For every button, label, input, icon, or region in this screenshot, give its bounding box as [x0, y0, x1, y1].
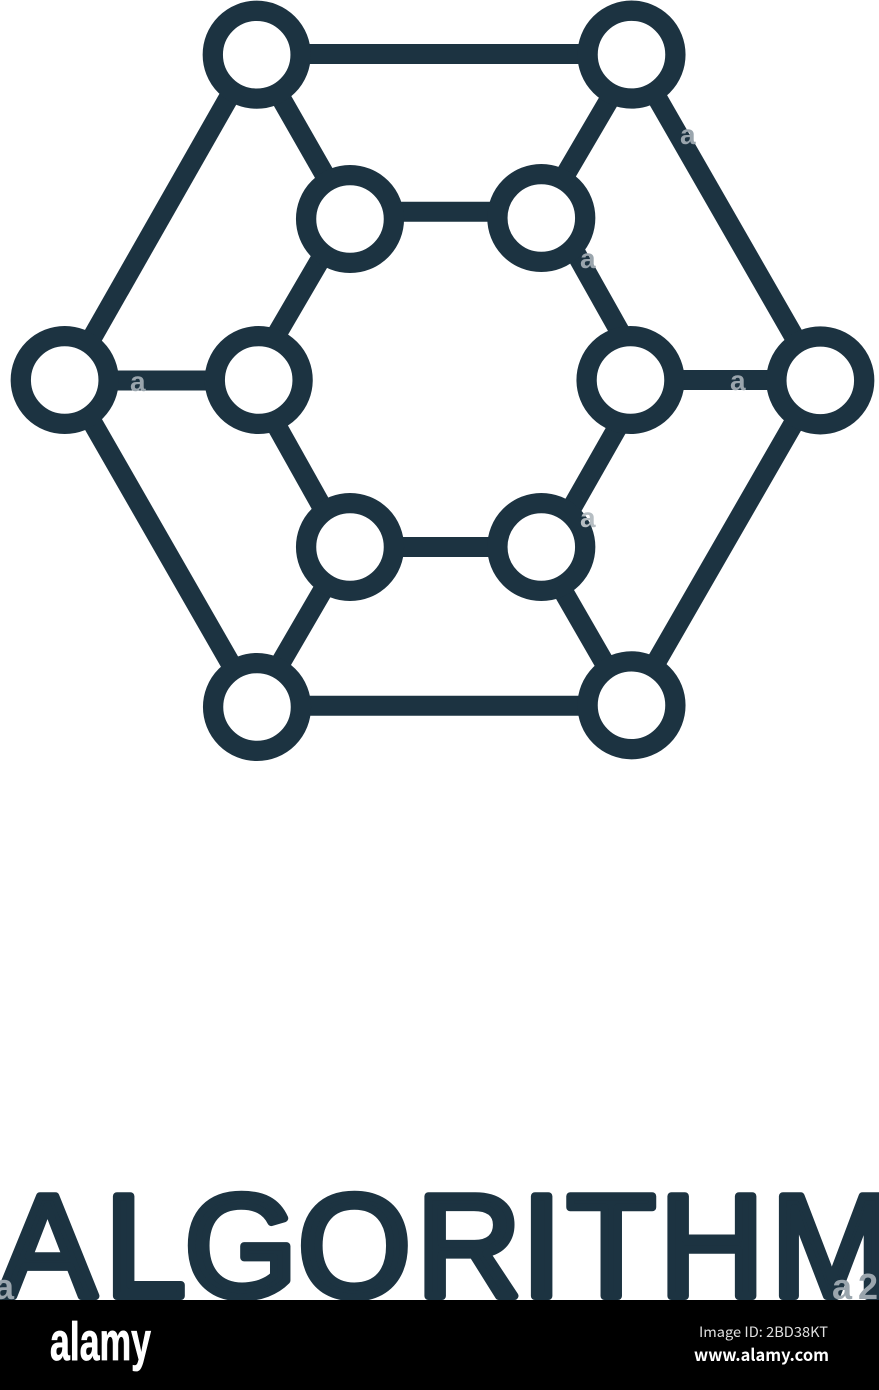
watermark fragments: a [832, 1266, 853, 1307]
image id: Image ID: 2BD38KT [699, 1322, 828, 1342]
watermark fragments: a [580, 502, 596, 533]
watermark fragments: a [130, 366, 146, 397]
network connecting lines [65, 54, 820, 707]
title: ALGORITHM [0, 1165, 879, 1327]
watermark fragments: a [680, 119, 696, 150]
watermark fragments: a [580, 243, 596, 274]
icon: hexagonal network [21, 11, 864, 751]
watermark fragments: 2 [858, 1266, 878, 1307]
footer logo: alamy [50, 1312, 151, 1372]
footer bar [0, 1300, 879, 1390]
website address: www.alamy.com [694, 1342, 829, 1366]
watermark fragments: a [730, 365, 746, 396]
network nodes [21, 11, 864, 751]
